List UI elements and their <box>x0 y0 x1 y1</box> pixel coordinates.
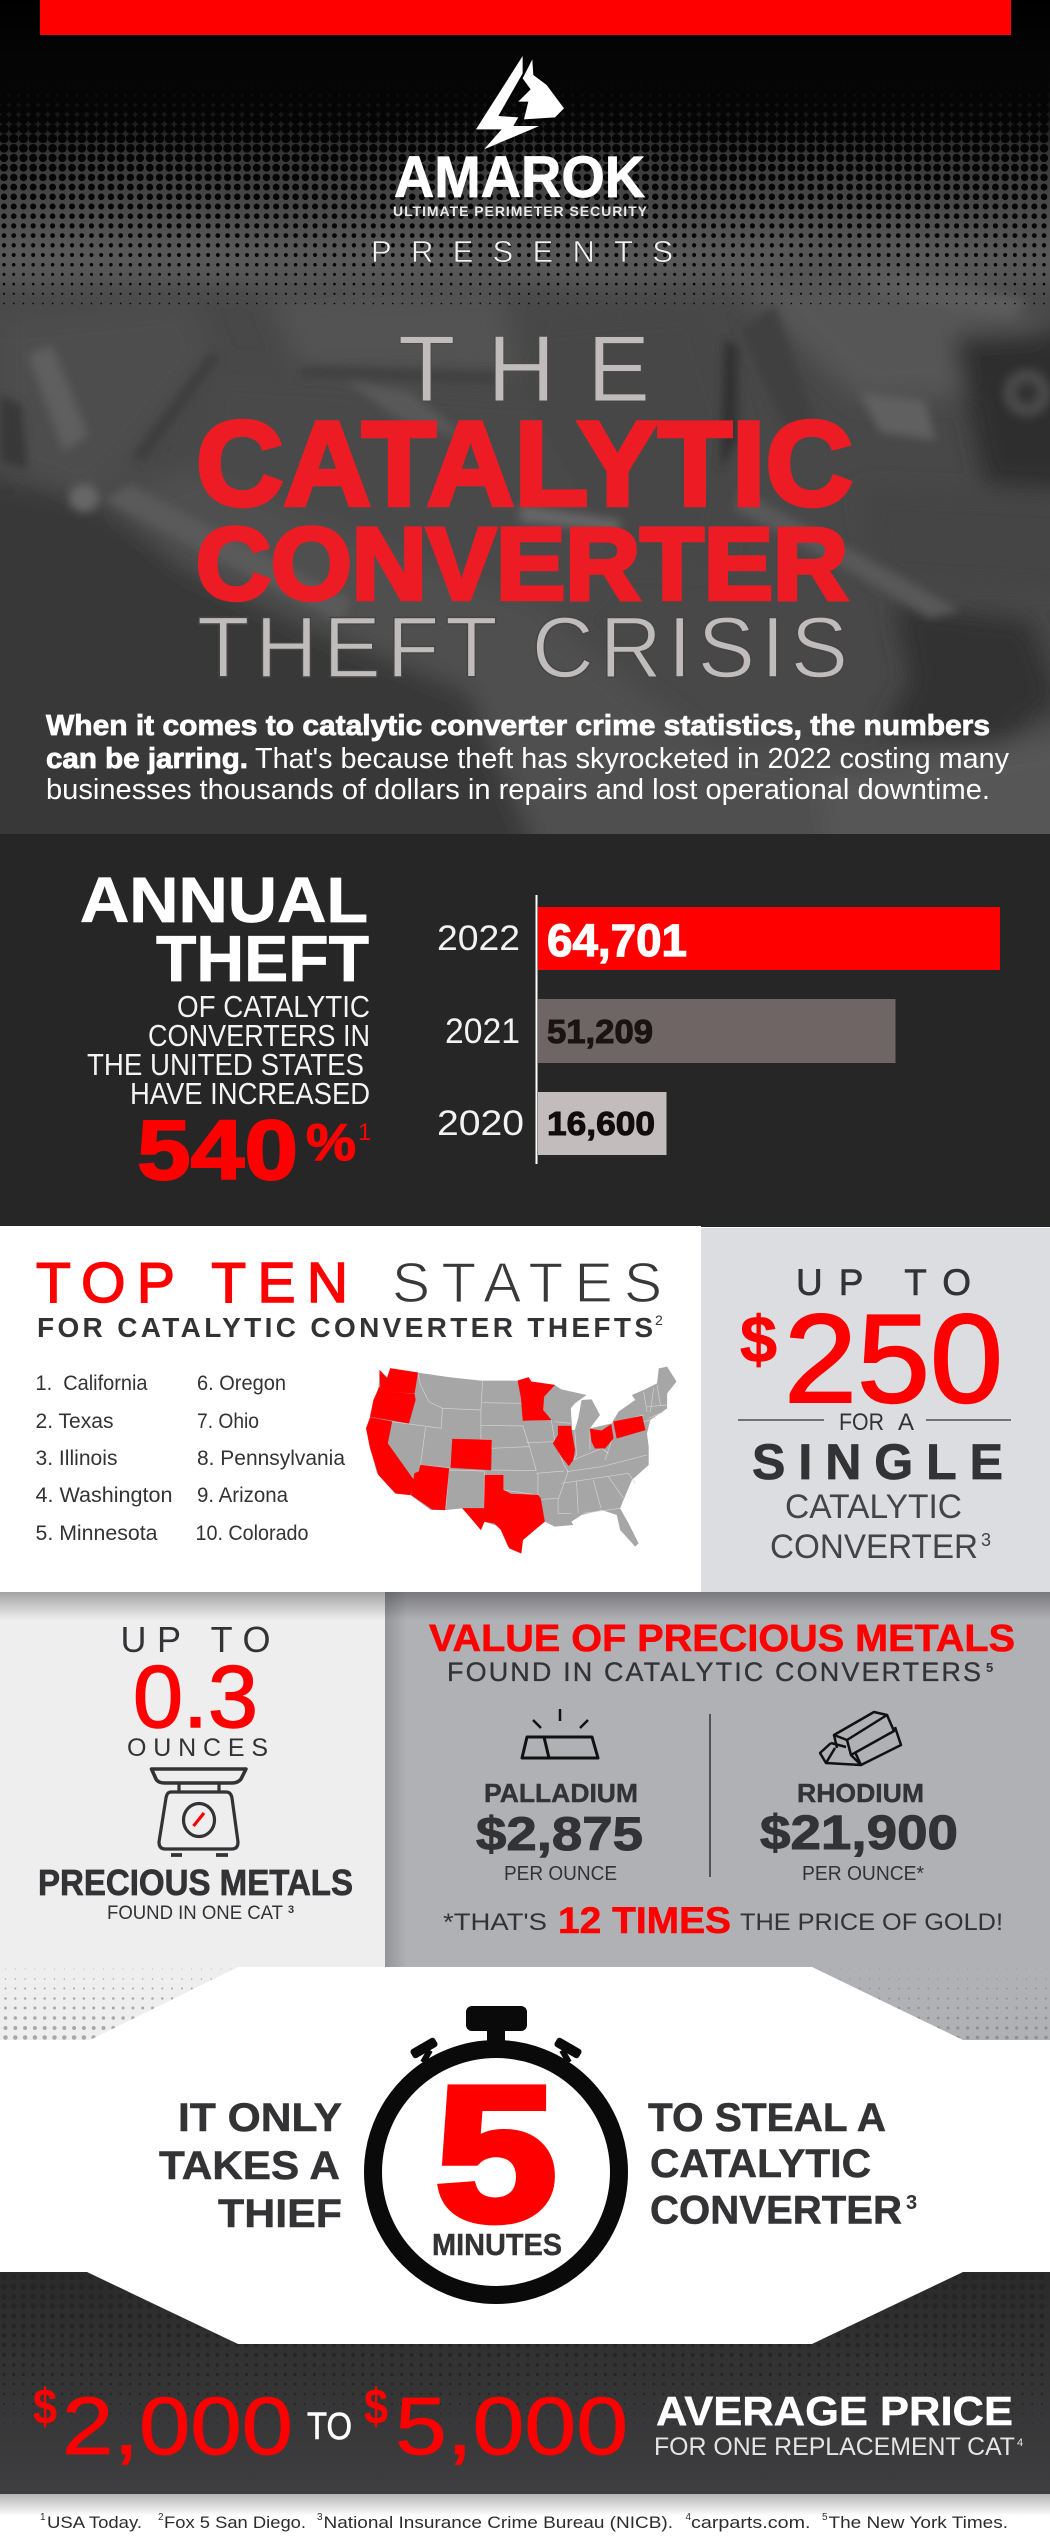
text: for a single catalytic converter: CATALYTIC <box>785 1488 962 1526</box>
icon: rhodium bars <box>820 1712 901 1765</box>
intro paragraph: That's because theft has skyrocketed in 2022 costing many <box>255 743 1010 775</box>
panel: up to $250 <box>701 1228 1050 1592</box>
list: states 1 to 5: 4. Washington <box>36 1484 172 1507</box>
stat: palladium price <box>476 1778 643 1885</box>
panel: top ten states <box>0 1226 701 1592</box>
text: for a single catalytic converter: A <box>898 1409 914 1436</box>
text: of catalytic converters: CONVERTERS IN <box>148 1018 370 1053</box>
text: precious metals: PRECIOUS METALS <box>38 1862 353 1903</box>
text: for a single catalytic converter <box>738 1409 1011 1566</box>
list: states 1 to 5: 5. Minnesota <box>36 1522 158 1545</box>
stat: $2,000 to $5,000: $ <box>364 2379 388 2435</box>
text: average price: AVERAGE PRICE <box>656 2388 1013 2434</box>
text: of catalytic converters: HAVE INCREASED <box>130 1076 370 1111</box>
title: THEFT CRISIS <box>197 600 848 696</box>
text: it only takes a thief: TAKES A <box>159 2144 340 2188</box>
title: CATALYTIC <box>196 397 853 531</box>
stat: palladium price: PALLADIUM <box>484 1778 638 1808</box>
footer: sources <box>0 2494 1050 2542</box>
icon: palladium bar <box>522 1709 598 1758</box>
stat: $250: $ <box>740 1302 777 1376</box>
list: states 1 to 5: 1. California <box>36 1372 148 1395</box>
text: for a single catalytic converter: CONVERTER <box>770 1528 978 1566</box>
text: to steal a catalytic converter: CONVERTER <box>650 2188 902 2232</box>
stat: 540 percent <box>137 1103 371 1197</box>
callout: 12 times the price of gold: THE PRICE OF GOLD! <box>740 1909 1003 1936</box>
logo: Amarok: ULTIMATE PERIMETER SECURITY <box>393 203 648 219</box>
heading: value of precious metals: 5 <box>986 1660 993 1675</box>
list: states 6 to 10: 10. Colorado <box>196 1522 308 1545</box>
stat: rhodium price: $21,900 <box>760 1807 958 1860</box>
stat: palladium price: PER OUNCE <box>504 1863 617 1885</box>
icon: stopwatch with 5 minutes <box>373 2006 619 2295</box>
logo: Amarok <box>393 56 648 219</box>
text: precious metals <box>38 1862 353 1924</box>
red top bar <box>40 0 1011 35</box>
text: it only takes a thief <box>159 2096 342 2236</box>
footer: sources: 4 <box>686 2512 692 2523</box>
stat: $250: 250 <box>784 1288 1003 1429</box>
panel: annual theft <box>0 834 1050 1227</box>
stat: $2,000 to $5,000: 2,000 <box>62 2381 293 2472</box>
bar chart: thefts by year: 2022 <box>437 919 520 958</box>
callout: 12 times the price of gold <box>443 1900 1003 1941</box>
heading: top ten states: STATES <box>392 1251 662 1315</box>
intro paragraph <box>46 710 1010 806</box>
stat: $2,000 to $5,000: 5,000 <box>395 2381 628 2472</box>
stat: 5: 5 <box>435 2046 557 2261</box>
text: of catalytic converters: THE UNITED STATES <box>87 1047 364 1082</box>
text: for a single catalytic converter: FOR <box>839 1409 884 1436</box>
panel: up to 0.3 ounces <box>0 1592 385 1968</box>
heading: value of precious metals: FOUND IN CATALYTIC CONVERTERS <box>447 1657 981 1687</box>
text: precious metals: FOUND IN ONE CAT <box>107 1903 283 1924</box>
text: it only takes a thief: THIEF <box>218 2192 342 2236</box>
heading: top ten states: 2 <box>655 1312 663 1328</box>
footer: sources: 5 <box>822 2512 828 2523</box>
text: of catalytic converters <box>87 989 370 1111</box>
bar chart: thefts by year <box>437 895 1000 1164</box>
list: states 6 to 10: 8. Pennsylvania <box>197 1447 345 1470</box>
panel: price band background <box>0 2272 1050 2494</box>
footer: sources: 3 <box>317 2512 323 2523</box>
stat: 540 percent: 540 <box>137 1103 298 1197</box>
list: states 6 to 10: 9. Arizona <box>197 1484 288 1507</box>
map: United States with highlighted states <box>366 1367 677 1553</box>
bar chart: thefts by year: 2021 <box>445 1012 520 1051</box>
intro paragraph: can be jarring. <box>46 743 248 775</box>
bar chart: thefts by year: 16,600 <box>547 1105 655 1142</box>
intro paragraph: businesses thousands of dollars in repairs and lost operational downtime. <box>46 774 990 806</box>
stat: palladium price: $2,875 <box>476 1807 643 1860</box>
list: states 6 to 10: 7. Ohio <box>197 1410 259 1433</box>
intro paragraph: When it comes to catalytic converter crime statistics, the numbers <box>46 710 990 742</box>
text: of catalytic converters: OF CATALYTIC <box>177 989 370 1024</box>
text: for a single catalytic converter: SINGLE <box>752 1434 1003 1490</box>
heading: value of precious metals <box>429 1618 1015 1687</box>
heading: annual theft: THEFT <box>156 922 369 995</box>
text: to steal a catalytic converter: 3 <box>906 2192 917 2214</box>
title: CONVERTER <box>196 507 848 621</box>
title <box>196 316 853 696</box>
stat: $2,000 to $5,000: $ <box>33 2379 57 2435</box>
text: average price: 4 <box>1017 2437 1023 2449</box>
text: ounces: OUNCES <box>127 1734 268 1762</box>
icon: kitchen scale <box>152 1769 246 1855</box>
text: minutes: MINUTES <box>432 2227 562 2262</box>
stat: 540 percent: 1 <box>358 1119 371 1146</box>
stat: rhodium price: PER OUNCE* <box>802 1863 924 1885</box>
stat: 540 percent: % <box>306 1114 356 1172</box>
footer: sources: The New York Times. <box>828 2513 1008 2532</box>
text: it only takes a thief: IT ONLY <box>178 2096 342 2140</box>
photo: blurred catalytic converter background <box>0 130 1050 860</box>
panel: average replacement price <box>33 2379 1023 2472</box>
text: up to: UP TO <box>796 1262 971 1303</box>
text: for a single catalytic converter: 3 <box>981 1530 991 1550</box>
heading: annual theft <box>80 864 369 995</box>
panel: dotted corners behind stopwatch <box>0 1967 1050 2041</box>
footer: sources: 2 <box>158 2512 164 2523</box>
text: average price: FOR ONE REPLACEMENT CAT <box>654 2433 1015 2461</box>
list: states 1 to 5: 2. Texas <box>36 1410 114 1433</box>
stat: rhodium price <box>760 1778 958 1885</box>
bar chart: thefts by year: 2020 <box>437 1104 524 1143</box>
text: to steal a catalytic converter <box>648 2096 917 2232</box>
footer: sources: carparts.com. <box>691 2513 810 2532</box>
stat: 0.3: 0.3 <box>133 1647 258 1746</box>
panel: value of precious metals <box>385 1592 1050 1968</box>
stat: $2,000 to $5,000 <box>33 2379 628 2472</box>
callout: 12 times the price of gold: *THAT'S <box>443 1909 547 1936</box>
callout: 12 times the price of gold: 12 TIMES <box>558 1900 731 1941</box>
bar chart: thefts by year: 51,209 <box>547 1013 653 1050</box>
list: states 1 to 5 <box>36 1372 172 1545</box>
stat: rhodium price: RHODIUM <box>797 1778 924 1808</box>
footer: sources: USA Today. <box>47 2513 142 2532</box>
text: to steal a catalytic converter: TO STEAL A <box>648 2096 886 2140</box>
heading: top ten states: FOR CATALYTIC CONVERTER THEFTS <box>37 1312 653 1343</box>
panel: hero header with photo background <box>0 0 1050 860</box>
list: states 6 to 10 <box>196 1372 345 1545</box>
text: average price <box>654 2388 1023 2461</box>
divider <box>709 1714 711 1877</box>
text: to steal a catalytic converter: CATALYTIC <box>650 2142 871 2186</box>
footer: sources: Fox 5 San Diego. <box>164 2513 306 2532</box>
text: precious metals: 3 <box>288 1904 294 1916</box>
panel: five minutes white band <box>0 1967 1050 2344</box>
bar chart: thefts by year: 64,701 <box>547 915 687 966</box>
heading: top ten states <box>36 1251 663 1343</box>
list: states 6 to 10: 6. Oregon <box>197 1372 286 1395</box>
logo: Amarok: AMAROK <box>394 145 645 210</box>
list: states 1 to 5: 3. Illinois <box>36 1447 118 1470</box>
stat: $2,000 to $5,000: TO <box>307 2406 352 2448</box>
footer: sources: 1 <box>40 2512 46 2523</box>
halftone dot overlay <box>4 61 1050 304</box>
heading: top ten states: TOP TEN <box>36 1251 348 1315</box>
footer: sources: National Insurance Crime Bureau (NICB). <box>324 2513 673 2532</box>
heading: value of precious metals: VALUE OF PRECIOUS METALS <box>429 1618 1015 1660</box>
heading: annual theft: ANNUAL <box>80 864 368 936</box>
text: up to: UP TO <box>120 1619 270 1660</box>
title: THE <box>398 316 650 421</box>
text: presents: PRESENTS <box>371 234 673 269</box>
